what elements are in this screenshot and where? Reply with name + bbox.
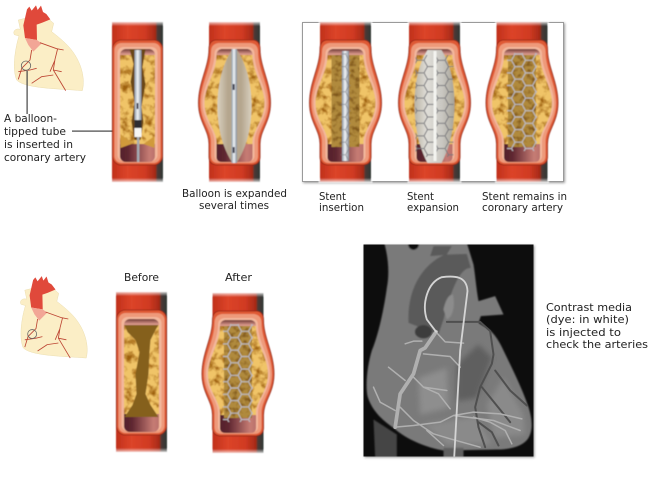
caption: stent remains: coronary artery (482, 201, 564, 214)
artery before treatment (115, 292, 168, 452)
artery: stent expansion (394, 21, 474, 183)
caption: balloon expanded (182, 187, 287, 212)
caption: stent remains (482, 190, 567, 214)
heading: after: After (225, 271, 253, 284)
caption: contrast media: Contrast media (546, 301, 632, 314)
caption: stent expansion: expansion (407, 201, 459, 214)
callout: balloon-tipped tube: coronary artery (4, 151, 87, 164)
caption: stent insertion: Stent (319, 190, 346, 203)
heading: before: Before (124, 271, 159, 284)
caption: contrast media: (dye: in white) (546, 313, 629, 326)
artery with expanded balloon (194, 21, 274, 183)
heart icon, lower row (20, 276, 87, 358)
caption: stent insertion (319, 190, 364, 214)
artery after treatment (198, 292, 278, 454)
caption: stent remains: Stent remains in (482, 190, 567, 203)
x-ray angiogram of heart (364, 239, 534, 458)
panel: stent sequence (302, 21, 564, 183)
caption: stent expansion: Stent (407, 190, 434, 203)
artery: stent remains (482, 21, 562, 183)
artery with balloon catheter inserted (111, 22, 164, 182)
caption: balloon expanded: Balloon is expanded (182, 187, 287, 200)
caption: balloon expanded: several times (199, 199, 269, 212)
callout: balloon-tipped tube: A balloon- (4, 112, 57, 125)
caption: stent insertion: insertion (319, 201, 364, 214)
caption: contrast media: check the arteries (546, 338, 648, 351)
artery: stent insertion (306, 21, 386, 183)
caption: contrast media: is injected to (546, 326, 621, 339)
callout: balloon-tipped tube: is inserted in (4, 138, 73, 151)
heart icon with catheter site (14, 5, 83, 91)
callout: balloon-tipped tube (4, 71, 134, 164)
caption: stent expansion (407, 190, 459, 214)
caption: contrast media (546, 301, 648, 351)
callout: balloon-tipped tube: tipped tube (4, 125, 66, 138)
